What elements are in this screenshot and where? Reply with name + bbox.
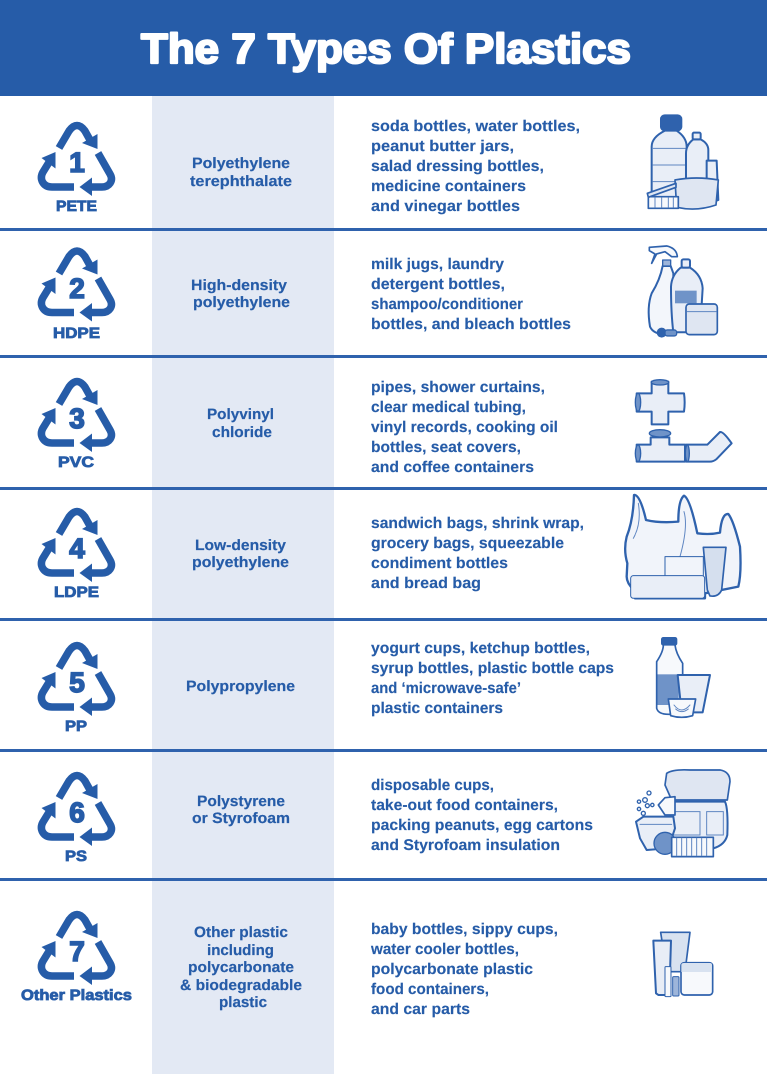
plastic name: Other: plastic [219, 994, 267, 1011]
panel: PVC row [41, 379, 732, 476]
plastic name: Other [180, 924, 302, 1011]
examples: PETE: and vinegar bottles [371, 198, 520, 215]
examples: Other: polycarbonate plastic [371, 961, 533, 978]
examples: PETE: medicine containers [371, 178, 526, 195]
icon: recycling symbol 7 Other Plastics: Other Plastics [21, 987, 132, 1004]
row dividers [0, 228, 767, 881]
examples: PVC: pipes, shower curtains, [371, 379, 545, 396]
examples: HDPE: milk jugs, laundry [371, 256, 504, 273]
plastic name: LDPE [192, 537, 289, 571]
examples: Other: food containers, [371, 981, 489, 998]
plastic name: LDPE: Low-density [195, 537, 287, 554]
examples: PS [371, 777, 593, 854]
icon: recycling symbol 6 PS: 6 [69, 797, 85, 828]
icon: recycling symbol 5 PP [41, 646, 111, 735]
icon: recycling symbol 6 PS: PS [65, 848, 87, 865]
plastic name: Other: Other plastic [194, 924, 288, 941]
plastic name: PETE: terephthalate [190, 173, 292, 190]
plastic name: Other: & biodegradable [180, 977, 302, 994]
examples: PP: yogurt cups, ketchup bottles, [371, 640, 590, 657]
examples: PP: syrup bottles, plastic bottle caps [371, 660, 614, 677]
examples: PETE: peanut butter jars, [371, 138, 514, 155]
icon: recycling symbol 4 LDPE: LDPE [54, 584, 99, 601]
examples: PP [371, 640, 614, 717]
icon: plastic bottles and tubs [647, 115, 718, 209]
icon: recycling symbol 2 HDPE [41, 251, 111, 342]
plastic name: HDPE [191, 277, 290, 311]
icon: recycling symbol 1 PETE [41, 126, 111, 215]
examples: HDPE: shampoo/conditioner [371, 296, 523, 313]
icon: foam containers and packing peanuts [636, 770, 730, 857]
examples: HDPE: detergent bottles, [371, 276, 505, 293]
plastic name: HDPE: polyethylene [193, 294, 290, 311]
examples: PVC [371, 379, 558, 476]
examples: PP: plastic containers [371, 700, 503, 717]
plastic name: PS: or Styrofoam [192, 810, 290, 827]
examples: LDPE: sandwich bags, shrink wrap, [371, 515, 584, 532]
icon: spray bottle, detergent and jar [649, 246, 717, 338]
panel: PP row [41, 638, 710, 735]
panel: HDPE row [41, 246, 717, 342]
plastic name: PETE: Polyethylene [192, 155, 290, 172]
icon: recycling symbol 3 PVC: PVC [58, 454, 94, 471]
examples: PS: take-out food containers, [371, 797, 558, 814]
panel: PETE row [41, 115, 718, 215]
icon: tubes, lip balm and jar [653, 932, 713, 997]
icon: recycling symbol 1 PETE: 1 [69, 147, 85, 178]
examples: PETE: soda bottles, water bottles, [371, 118, 580, 135]
icon: recycling symbol 3 PVC [41, 382, 111, 471]
plastic name: HDPE: High-density [191, 277, 288, 294]
examples: Other [370, 921, 558, 1018]
icon: recycling symbol 7 Other Plastics: 7 [69, 936, 85, 967]
icon: recycling symbol 1 PETE: PETE [56, 198, 97, 215]
icon: bottle, cup and yogurt pot [657, 638, 710, 717]
examples: Other: baby bottles, sippy cups, [371, 921, 558, 938]
examples: HDPE: bottles, and bleach bottles [371, 316, 571, 333]
examples: LDPE [371, 515, 584, 592]
icon: recycling symbol 5 PP: 5 [69, 667, 85, 698]
examples: PVC: bottles, seat covers, [371, 439, 521, 456]
icon: plastic bags and squeeze tube [625, 495, 741, 598]
icon: recycling symbol 2 HDPE: HDPE [53, 325, 100, 342]
plastic name: LDPE: polyethylene [192, 554, 289, 571]
shaded name column [152, 96, 334, 1074]
plastic name: PVC [207, 406, 274, 441]
examples: HDPE [371, 256, 571, 333]
icon: recycling symbol 7 Other Plastics [21, 914, 132, 1004]
plastic name: PVC: chloride [212, 424, 272, 441]
plastic name: PS [192, 793, 290, 827]
icon: recycling symbol 4 LDPE [41, 512, 111, 601]
icon: recycling symbol 5 PP: PP [65, 718, 87, 735]
plastic name: PP: Polypropylene [186, 678, 295, 695]
panel: Other Plastics row [21, 914, 713, 1018]
plastic name: Other: polycarbonate [188, 959, 294, 976]
examples: Other: and car parts [371, 1001, 470, 1018]
examples: LDPE: and bread bag [371, 575, 481, 592]
icon: PVC pipe fittings [635, 380, 732, 462]
examples: PS: and Styrofoam insulation [371, 837, 560, 854]
panel: LDPE row [41, 495, 741, 601]
plastic name: PS: Polystyrene [197, 793, 285, 810]
icon: recycling symbol 6 PS [41, 776, 111, 865]
plastic name: Other: including [207, 942, 274, 959]
examples: PS: packing peanuts, egg cartons [371, 817, 593, 834]
icon: recycling symbol 4 LDPE: 4 [69, 533, 85, 564]
examples: PETE [371, 118, 580, 215]
plastic name: PETE [190, 155, 292, 190]
header banner [0, 0, 767, 96]
examples: PP: and ‘microwave-safe’ [371, 680, 521, 697]
examples: PETE: salad dressing bottles, [371, 158, 544, 175]
panel: PS row [41, 770, 730, 865]
examples: PS: disposable cups, [371, 777, 494, 794]
examples: Other: water cooler bottles, [370, 941, 519, 958]
icon: recycling symbol 2 HDPE: 2 [69, 273, 85, 304]
icon: recycling symbol 3 PVC: 3 [69, 403, 85, 434]
examples: PVC: vinyl records, cooking oil [371, 419, 558, 436]
examples: PVC: clear medical tubing, [371, 399, 526, 416]
plastic name: PVC: Polyvinyl [207, 406, 274, 423]
examples: LDPE: condiment bottles [371, 555, 508, 572]
title: The 7 Types Of Plastics [141, 25, 631, 72]
examples: PVC: and coffee containers [371, 459, 534, 476]
examples: LDPE: grocery bags, squeezable [371, 535, 564, 552]
